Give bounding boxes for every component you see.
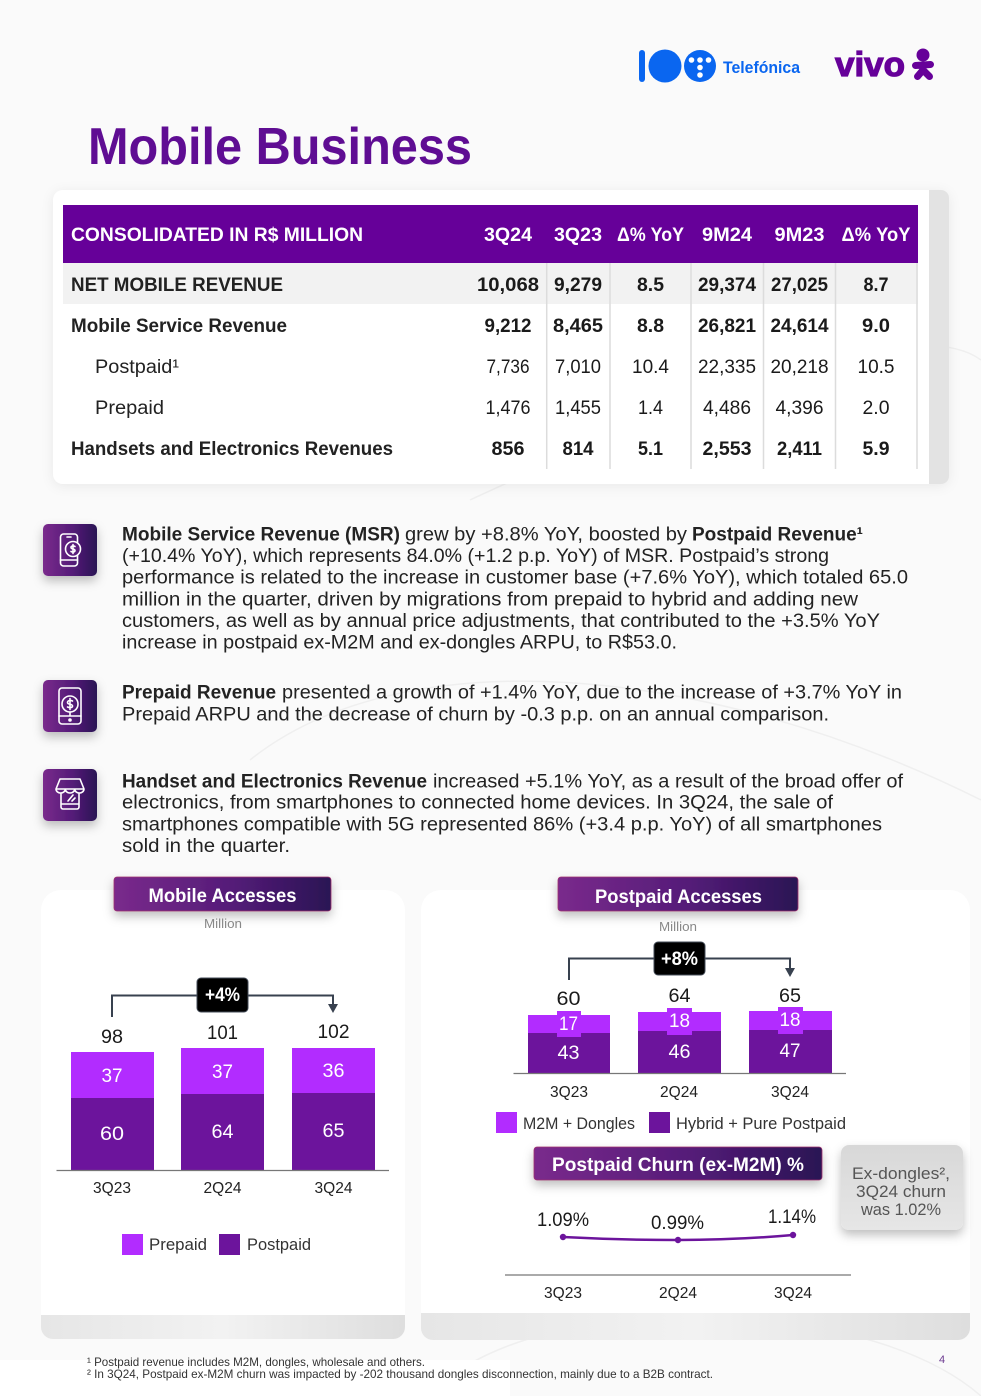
panel: postpaid accesses and churn bbox=[421, 877, 970, 1340]
row: mobile service revenue bbox=[71, 316, 890, 337]
row: handsets and electronics revenues: 2,553 bbox=[702, 439, 752, 460]
text block: mobile service revenue bbox=[122, 524, 908, 654]
stacked bar chart: postpaid accesses: 2Q24 bbox=[660, 1084, 698, 1101]
row: handsets and electronics revenues: 814 bbox=[562, 439, 594, 460]
table header row: CONSOLIDATED IN R$ MILLION bbox=[71, 225, 363, 246]
stacked bar chart: postpaid accesses: 3Q23 bbox=[550, 1084, 588, 1101]
row: mobile service revenue: 24,614 bbox=[770, 316, 829, 337]
table header row: 9M23 bbox=[774, 225, 824, 246]
row: prepaid: 4,396 bbox=[776, 398, 824, 419]
table header row: Δ% YoY bbox=[617, 225, 684, 246]
stacked bar chart: mobile accesses bbox=[56, 1022, 389, 1197]
footnotes bbox=[87, 1355, 713, 1381]
line chart: postpaid churn: 3Q24 bbox=[774, 1285, 812, 1302]
callout: ex-dongles churn: was 1.02% bbox=[860, 1200, 941, 1219]
row: prepaid: 1,455 bbox=[555, 398, 601, 419]
heading: mobile accesses bbox=[114, 877, 331, 911]
row: postpaid bbox=[95, 357, 894, 378]
heading: postpaid accesses bbox=[558, 877, 798, 911]
row: handsets and electronics revenues: 856 bbox=[492, 439, 524, 460]
text block: mobile service revenue: performance is related to the increase in customer base (+7.6% YoY), which totaled 65.0 bbox=[122, 568, 908, 588]
logo: vivo: vivo bbox=[835, 46, 905, 84]
text block: handset and electronics revenue bbox=[122, 772, 904, 857]
panel: mobile accesses bbox=[41, 877, 405, 1339]
row: postpaid: 10.5 bbox=[858, 357, 894, 378]
title: Mobile Business bbox=[88, 118, 472, 176]
row: prepaid: 2.0 bbox=[862, 398, 890, 419]
text block: prepaid revenue: Prepaid ARPU and the decrease of churn by -0.3 p.p. on an annual comparison. bbox=[122, 704, 829, 726]
row: net mobile revenue bbox=[71, 275, 888, 296]
text block: mobile service revenue: (+10.4% YoY), which represents 84.0% (+1.2 p.p. YoY) of MSR. Postpaid’s strong bbox=[122, 546, 829, 567]
icon: phone storefront bbox=[43, 769, 97, 821]
stacked bar chart: postpaid accesses: 43 bbox=[558, 1043, 580, 1064]
table header row: 9M24 bbox=[702, 225, 752, 246]
stacked bar chart: mobile accesses: 102 bbox=[318, 1022, 350, 1043]
row: mobile service revenue: 8.8 bbox=[637, 316, 664, 337]
legend: postpaid accesses bbox=[496, 1112, 846, 1133]
text block: handset and electronics revenue: smartphones compatible with 5G represented 86% (+3.4 p.p. YoY) of all smartphones bbox=[122, 814, 882, 836]
stacked bar chart: mobile accesses: 3Q23 bbox=[93, 1180, 131, 1197]
row: net mobile revenue: NET MOBILE REVENUE bbox=[71, 275, 283, 296]
icon: smartphone with dollar bbox=[43, 680, 97, 732]
stacked bar chart: mobile accesses: 65 bbox=[322, 1121, 344, 1142]
table header row: 3Q23 bbox=[554, 225, 602, 246]
text block: mobile service revenue: Postpaid Revenue¹ bbox=[692, 524, 863, 546]
row: postpaid: 10.4 bbox=[632, 357, 669, 378]
stacked bar chart: postpaid accesses: 65 bbox=[779, 986, 801, 1007]
text block: handset and electronics revenue: electronics, from smartphones to connected home devices. In 3Q24, the sale of bbox=[122, 792, 834, 814]
row: mobile service revenue: 26,821 bbox=[698, 316, 756, 337]
unit label: Million bbox=[659, 919, 697, 934]
legend: mobile accesses: Postpaid bbox=[247, 1235, 311, 1254]
logo: Telefónica 100 years: Telefónica bbox=[723, 58, 800, 77]
stacked bar chart: mobile accesses: 101 bbox=[207, 1023, 238, 1044]
row: prepaid: 1,476 bbox=[486, 398, 530, 419]
text block: prepaid revenue: Prepaid Revenue bbox=[122, 682, 276, 704]
stacked bar chart: postpaid accesses: 46 bbox=[668, 1042, 690, 1063]
table header row: 3Q24 bbox=[484, 225, 532, 246]
row: postpaid: 7,736 bbox=[486, 357, 530, 378]
heading: postpaid churn: Postpaid Churn (ex-M2M) % bbox=[552, 1155, 804, 1176]
growth arrow +4%: +4% bbox=[205, 985, 240, 1006]
stacked bar chart: postpaid accesses: 47 bbox=[780, 1041, 800, 1062]
stacked bar chart: mobile accesses: 98 bbox=[101, 1027, 123, 1048]
stacked bar chart: mobile accesses: 64 bbox=[212, 1122, 234, 1143]
row: postpaid: 7,010 bbox=[555, 357, 601, 378]
legend: postpaid accesses: M2M + Dongles bbox=[523, 1114, 635, 1133]
text block: mobile service revenue: increase in postpaid ex-M2M and ex-dongles ARPU, to R$53.0. bbox=[122, 632, 677, 654]
row: net mobile revenue: 8.7 bbox=[864, 275, 888, 296]
callout: ex-dongles churn: 3Q24 churn bbox=[856, 1182, 946, 1201]
stacked bar chart: mobile accesses: 2Q24 bbox=[204, 1180, 242, 1197]
row: mobile service revenue: Mobile Service Revenue bbox=[71, 316, 287, 337]
row: prepaid bbox=[95, 398, 890, 419]
legend: mobile accesses: Prepaid bbox=[149, 1235, 207, 1254]
line chart: postpaid churn bbox=[505, 1207, 851, 1302]
stacked bar chart: mobile accesses: 3Q24 bbox=[314, 1180, 353, 1197]
growth arrow +8% bbox=[569, 942, 795, 980]
stacked bar chart: postpaid accesses: 3Q24 bbox=[771, 1084, 809, 1101]
growth arrow +4% bbox=[112, 978, 338, 1017]
line chart: postpaid churn: 1.09% bbox=[537, 1210, 589, 1231]
row: net mobile revenue: 27,025 bbox=[771, 275, 828, 296]
row: postpaid: 20,218 bbox=[770, 357, 828, 378]
stacked bar chart: mobile accesses: 36 bbox=[322, 1061, 344, 1082]
stacked bar chart: mobile accesses: 60 bbox=[100, 1124, 124, 1145]
row: handsets and electronics revenues: 2,411 bbox=[777, 439, 822, 460]
legend: postpaid accesses: Hybrid + Pure Postpaid bbox=[676, 1114, 846, 1133]
row: prepaid: 1.4 bbox=[638, 398, 663, 419]
text block: mobile service revenue: grew by +8.8% YoY, boosted by bbox=[405, 524, 688, 546]
stacked bar chart: postpaid accesses: 60 bbox=[556, 989, 580, 1010]
line chart: postpaid churn: 3Q23 bbox=[544, 1285, 582, 1302]
row: net mobile revenue: 10,068 bbox=[477, 275, 539, 296]
panel: financial table bbox=[53, 190, 949, 484]
line chart: postpaid churn: 2Q24 bbox=[659, 1285, 697, 1302]
row: prepaid: 4,486 bbox=[703, 398, 751, 419]
stacked bar chart: postpaid accesses: 18 bbox=[669, 1011, 690, 1032]
text block: mobile service revenue: Mobile Service Revenue (MSR) bbox=[122, 524, 400, 546]
row: postpaid: Postpaid¹ bbox=[95, 357, 179, 378]
table header row bbox=[63, 205, 918, 263]
legend: mobile accesses bbox=[122, 1234, 311, 1255]
stacked bar chart: postpaid accesses: 17 bbox=[559, 1014, 578, 1035]
callout: ex-dongles churn: Ex-dongles², bbox=[852, 1164, 950, 1183]
row: handsets and electronics revenues: Handsets and Electronics Revenues bbox=[71, 439, 393, 460]
row: net mobile revenue: 8.5 bbox=[637, 275, 664, 296]
text block: mobile service revenue: customers, as well as by annual price adjustments, that contributed to the +3.5% YoY bbox=[122, 611, 880, 632]
row: net mobile revenue: 9,279 bbox=[554, 275, 602, 296]
stacked bar chart: mobile accesses: 37 bbox=[102, 1066, 122, 1087]
page number: 4 bbox=[939, 1354, 945, 1366]
heading: postpaid accesses: Postpaid Accesses bbox=[595, 887, 762, 908]
stacked bar chart: mobile accesses: 37 bbox=[212, 1062, 233, 1083]
text block: handset and electronics revenue: sold in the quarter. bbox=[122, 836, 290, 857]
stacked bar chart: postpaid accesses bbox=[514, 986, 846, 1101]
footnotes: ¹ Postpaid revenue includes M2M, dongles, wholesale and others. bbox=[87, 1355, 425, 1369]
icon: phone with coin bbox=[43, 524, 97, 576]
text block: prepaid revenue bbox=[122, 682, 902, 726]
row: postpaid: 22,335 bbox=[698, 357, 756, 378]
logo: Telefónica 100 years bbox=[639, 50, 800, 82]
line chart: postpaid churn: 0.99% bbox=[651, 1213, 704, 1234]
row: handsets and electronics revenues bbox=[71, 439, 890, 460]
row: net mobile revenue: 29,374 bbox=[698, 275, 756, 296]
row: prepaid: Prepaid bbox=[95, 398, 164, 419]
row: mobile service revenue: 8,465 bbox=[553, 316, 603, 337]
footnotes: ² In 3Q24, Postpaid ex-M2M churn was impacted by -202 thousand dongles disconnection, mainly due to a B2B contract. bbox=[87, 1367, 713, 1381]
unit label: Million bbox=[204, 916, 242, 931]
growth arrow +8%: +8% bbox=[661, 949, 698, 970]
row: handsets and electronics revenues: 5.1 bbox=[638, 439, 663, 460]
table header row: Δ% YoY bbox=[842, 225, 911, 246]
heading: postpaid churn bbox=[534, 1147, 822, 1180]
stacked bar chart: postpaid accesses: 18 bbox=[780, 1010, 800, 1031]
callout: ex-dongles churn bbox=[841, 1145, 963, 1230]
stacked bar chart: postpaid accesses: 64 bbox=[668, 986, 691, 1007]
row: mobile service revenue: 9,212 bbox=[484, 316, 532, 337]
text block: handset and electronics revenue: increased +5.1% YoY, as a result of the broad offer of bbox=[433, 772, 904, 792]
heading: mobile accesses: Mobile Accesses bbox=[148, 886, 296, 907]
text block: mobile service revenue: million in the quarter, driven by migrations from prepaid to hybrid and adding new bbox=[122, 590, 858, 610]
row: handsets and electronics revenues: 5.9 bbox=[862, 439, 890, 460]
row: mobile service revenue: 9.0 bbox=[862, 316, 890, 337]
text block: handset and electronics revenue: Handset and Electronics Revenue bbox=[122, 772, 427, 792]
text block: prepaid revenue: presented a growth of +1.4% YoY, due to the increase of +3.7% YoY in bbox=[282, 682, 902, 704]
line chart: postpaid churn: 1.14% bbox=[768, 1207, 816, 1228]
